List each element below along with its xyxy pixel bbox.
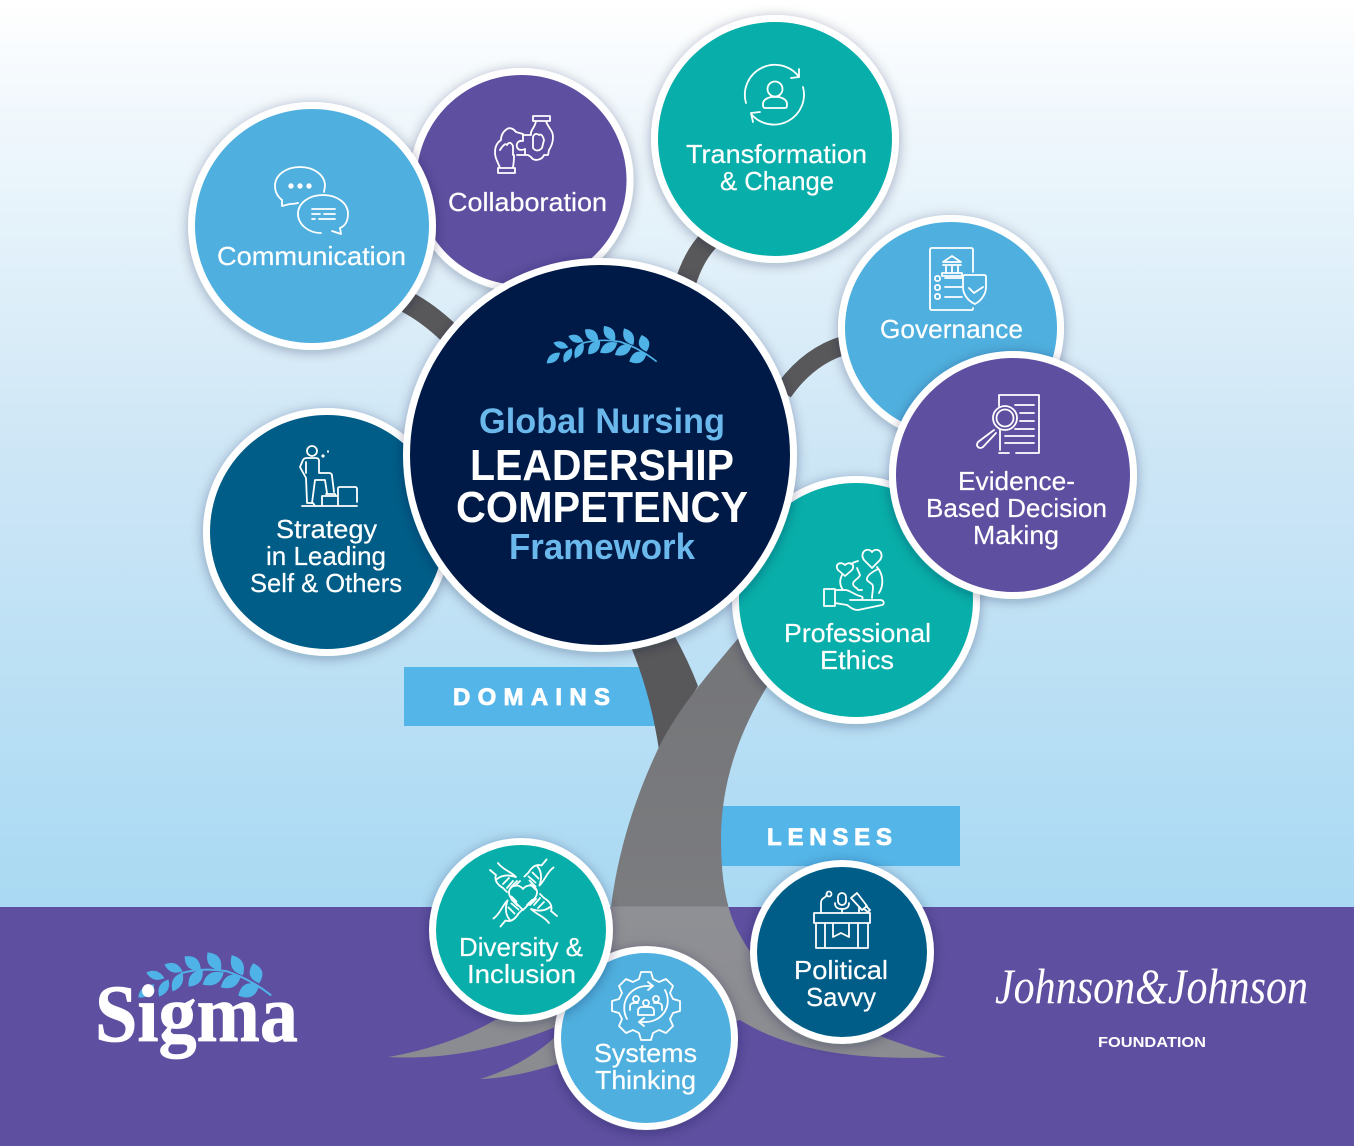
label: in Leading bbox=[266, 541, 386, 571]
label bbox=[784, 618, 931, 675]
lenses banner: LENSES bbox=[767, 824, 892, 851]
title: COMPETENCY bbox=[456, 483, 748, 532]
icon: gear with people bbox=[612, 972, 680, 1040]
background sky bbox=[0, 0, 1354, 908]
domains banner: DOMAINS bbox=[453, 684, 610, 711]
label bbox=[794, 955, 888, 1012]
title: Framework bbox=[509, 526, 696, 567]
domain: evidence-based decision making bbox=[889, 351, 1137, 599]
lens: systems thinking bbox=[554, 946, 738, 1130]
icon: four hands and heart bbox=[490, 860, 557, 926]
lens: diversity and inclusion bbox=[429, 838, 613, 1022]
icon: document with shield bbox=[930, 248, 986, 310]
label: Ethics bbox=[820, 645, 894, 675]
lenses banner bbox=[715, 806, 960, 866]
label bbox=[686, 139, 867, 196]
label: Strategy bbox=[276, 514, 377, 544]
label: Thinking bbox=[595, 1065, 696, 1095]
label bbox=[926, 466, 1107, 550]
icon: laurel sprig bbox=[547, 326, 657, 363]
title bbox=[456, 402, 748, 567]
label: Diversity & bbox=[459, 932, 583, 962]
domain: governance bbox=[838, 215, 1064, 441]
label: Self & Others bbox=[250, 568, 402, 598]
domains banner bbox=[404, 667, 662, 726]
logo: Johnson and Johnson Foundation: FOUNDATION bbox=[1098, 1034, 1206, 1051]
label: Communication bbox=[217, 241, 406, 271]
icon: sigma laurel sprig bbox=[138, 952, 271, 998]
label: Savvy bbox=[806, 982, 876, 1012]
lens: political savvy bbox=[750, 860, 934, 1044]
label: Transformation bbox=[686, 139, 867, 169]
domain: transformation and change bbox=[651, 15, 899, 263]
title: Global Nursing bbox=[479, 402, 725, 441]
domain: strategy in leading self and others bbox=[203, 408, 451, 656]
tree branches bbox=[407, 240, 845, 750]
logo: Johnson and Johnson Foundation bbox=[995, 958, 1308, 1051]
domain: communication bbox=[188, 102, 436, 350]
label: Professional bbox=[784, 618, 931, 648]
label: & Change bbox=[720, 166, 834, 196]
domain: professional ethics bbox=[732, 476, 980, 724]
icon: podium with microphones bbox=[814, 892, 870, 948]
title: LEADERSHIP bbox=[470, 441, 734, 490]
icon: hand with globe and hearts bbox=[824, 550, 884, 610]
label bbox=[250, 514, 402, 598]
label: Evidence- bbox=[958, 466, 1075, 496]
icon: magnifier on document bbox=[977, 395, 1039, 453]
label bbox=[459, 932, 583, 989]
center circle bbox=[403, 258, 797, 652]
ground band bbox=[0, 907, 1354, 1146]
icon: puzzle hands bbox=[495, 116, 553, 173]
icon: person stepping up bbox=[300, 446, 357, 506]
label: Collaboration bbox=[448, 187, 607, 217]
label: Governance bbox=[880, 314, 1023, 344]
icon: speech bubbles bbox=[275, 167, 348, 234]
label: Making bbox=[973, 520, 1059, 550]
label bbox=[594, 1038, 697, 1095]
domain: collaboration bbox=[410, 68, 634, 292]
icon: person with cycle arrows bbox=[745, 65, 804, 125]
label: Systems bbox=[594, 1038, 697, 1068]
tree trunk and roots bbox=[388, 630, 946, 1079]
label: Inclusion bbox=[467, 959, 576, 989]
label: Based Decision bbox=[926, 493, 1107, 523]
logo: Sigma: Sigma bbox=[95, 968, 298, 1059]
label: Political bbox=[794, 955, 888, 985]
